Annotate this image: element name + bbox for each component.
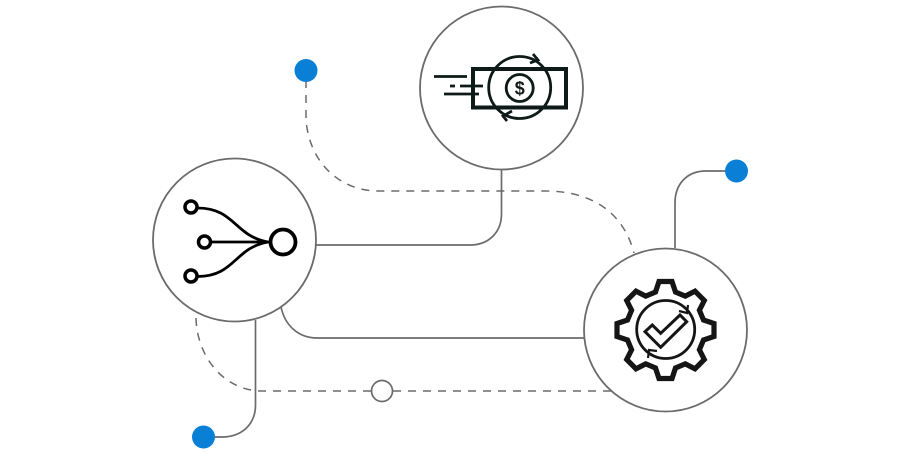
small hollow node [372,380,392,402]
panel: left circle with merge icon [153,158,316,322]
dashed connector: top dot to right circle [306,80,634,253]
connector: left circle to top circle [316,169,502,245]
icon: banknote with circulating arrows [434,54,566,121]
dollar sign: $ [515,78,525,98]
blue dot: top [294,59,318,82]
panel: top circle with money icon [420,6,583,170]
connector: right circle to right dot [675,171,736,248]
blue dot: bottom [192,426,215,448]
icon: gear with check mark [617,282,714,378]
panel: right circle with gear icon [584,248,747,412]
blue dot: right [725,160,748,182]
icon: three paths merging into one [185,201,296,282]
dashed connector: left circle to right circle [196,318,612,391]
connector: left circle to right circle [281,307,584,338]
connector: left circle to bottom dot [204,320,256,437]
